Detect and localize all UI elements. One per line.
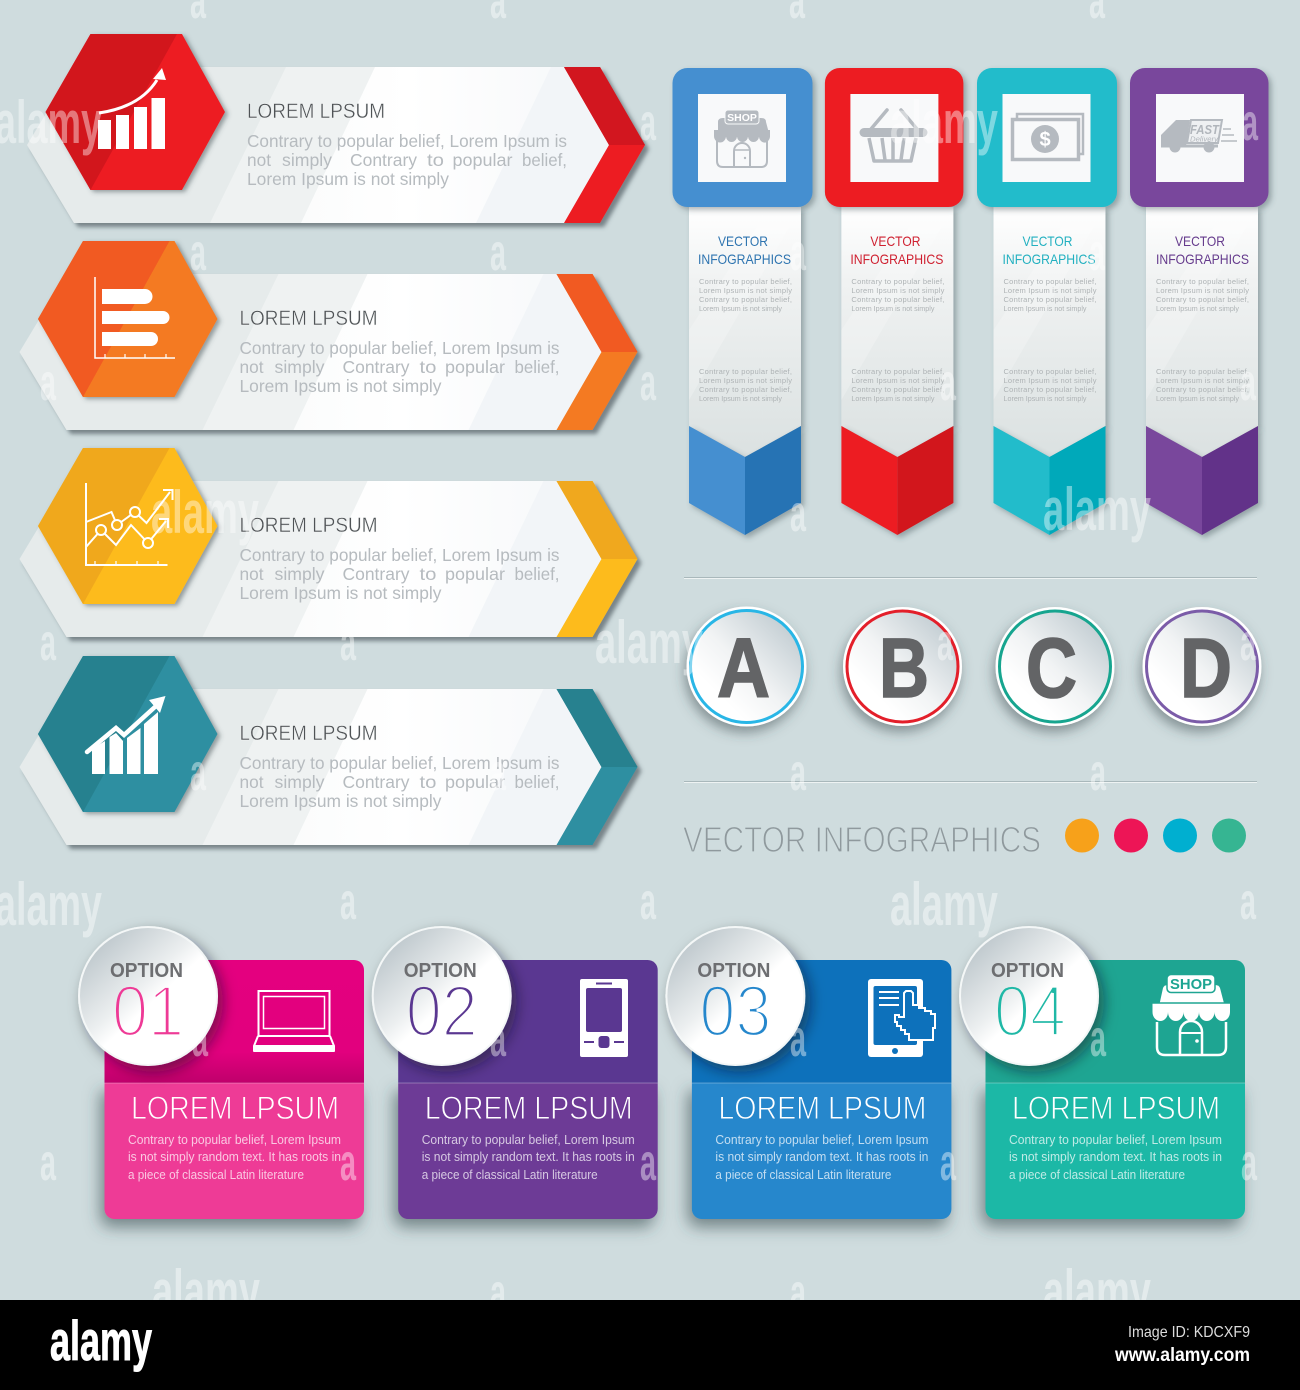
body text: Contrary to popular belief, Lorem Ipsum is — [240, 545, 560, 565]
small text block 2: Contrary to popular belief, — [1004, 385, 1096, 394]
small text block 1: Lorem Ipsum is not simply — [1004, 304, 1087, 313]
body text: simply — [274, 772, 325, 792]
small text block 2 — [1004, 367, 1097, 403]
icon: tablet with pointer hand — [868, 979, 935, 1057]
icon: shop: SHOP — [1170, 976, 1212, 993]
panel: banner 1 — [27, 34, 645, 223]
body text: belief, — [514, 564, 560, 584]
body text: Contrary to popular belief, Lorem Ipsum is — [240, 338, 560, 358]
icon: mobile phone — [580, 979, 628, 1057]
small text block 1: Lorem Ipsum is not simply — [1156, 286, 1249, 295]
small text block 1: Lorem Ipsum is not simply — [1156, 304, 1239, 313]
watermarks: a — [640, 873, 657, 931]
icon: banknotes: $ — [1039, 129, 1051, 151]
watermarks: alamy — [595, 609, 703, 676]
card body text: a piece of classical Latin literature — [1009, 1168, 1185, 1182]
option disc — [959, 926, 1099, 1066]
body text: not — [240, 564, 264, 584]
badge C — [996, 607, 1114, 726]
banner body — [20, 481, 638, 637]
body text: Contrary — [350, 150, 417, 170]
body text: Contrary — [342, 357, 410, 377]
small text block 2: Lorem Ipsum is not simply — [1156, 376, 1249, 385]
panel: column 3 cyan — [977, 68, 1117, 535]
watermarks: a — [490, 1010, 507, 1068]
watermarks: alamy — [0, 89, 102, 156]
title: VECTOR — [1022, 233, 1072, 249]
icon: fast delivery truck: Delivery — [1190, 134, 1219, 144]
icon tile — [850, 94, 938, 182]
watermarks: a — [1241, 1134, 1258, 1192]
icon frame — [672, 68, 812, 207]
panel: column 1 blue — [672, 68, 812, 535]
card bottom — [986, 1083, 1245, 1219]
icon: shop: SHOP — [727, 112, 757, 124]
banner body — [27, 67, 645, 223]
watermarks: a — [1089, 224, 1106, 282]
body text: belief, — [514, 772, 560, 792]
card body text — [715, 1133, 928, 1182]
small text block 2: Lorem Ipsum is not simply — [1004, 376, 1097, 385]
card body text: Contrary to popular belief, Lorem Ipsum — [128, 1133, 341, 1147]
arrow band upper facet — [556, 689, 638, 767]
small text block 2: Contrary to popular belief, — [1156, 385, 1249, 394]
title — [698, 233, 791, 267]
card title: LOREM LPSUM — [425, 1090, 633, 1126]
watermarks: a — [940, 354, 957, 412]
body text: Lorem Ipsum is not simply — [240, 376, 442, 396]
badge D — [1142, 607, 1262, 726]
card body text: a piece of classical Latin literature — [422, 1168, 598, 1182]
panel: option card 2 — [372, 926, 658, 1219]
watermarks: alamy — [0, 871, 102, 938]
heading: LOREM LPSUM — [240, 307, 378, 330]
watermarks: a — [1242, 94, 1259, 152]
card title: LOREM LPSUM — [718, 1090, 926, 1126]
chevron tail — [689, 426, 801, 535]
watermarks: a — [40, 1134, 57, 1192]
watermarks: alamy — [152, 1258, 260, 1325]
title: VECTOR — [718, 233, 768, 249]
panel: column 4 purple — [1130, 68, 1268, 535]
small text block 1: Contrary to popular belief, — [851, 277, 944, 286]
card title: LOREM LPSUM — [131, 1090, 339, 1126]
watermarks: a — [490, 224, 507, 282]
watermarks: a — [1090, 1010, 1107, 1068]
option number: 02 — [406, 972, 478, 1052]
card top — [692, 960, 951, 1083]
panel: banner 3 — [20, 448, 638, 637]
body text: belief, — [522, 150, 567, 170]
card body text — [1009, 1133, 1222, 1182]
small text block 1: Contrary to popular belief, — [699, 295, 792, 304]
watermarks: a — [190, 744, 207, 802]
watermarks: a — [937, 614, 954, 672]
body text: Contrary to popular belief, Lorem Ipsum is — [240, 753, 560, 773]
small text block 1 — [1004, 277, 1097, 313]
title: INFOGRAPHICS — [1156, 251, 1249, 267]
watermarks: a — [490, 744, 507, 802]
watermarks: a — [40, 614, 57, 672]
icon: basket — [864, 110, 923, 161]
watermarks: a — [40, 354, 57, 412]
small text block 2: Contrary to popular belief, — [851, 385, 944, 394]
heading: LOREM LPSUM — [240, 722, 378, 745]
small text block 1 — [1156, 277, 1249, 313]
small text block 2: Lorem Ipsum is not simply — [1156, 394, 1239, 403]
panel: option card 4 — [959, 926, 1245, 1219]
body text: simply — [274, 564, 325, 584]
badge C: C — [1026, 621, 1077, 715]
watermarks: a — [940, 1134, 957, 1192]
watermarks: alamy — [1043, 476, 1151, 543]
body text: Lorem Ipsum is not simply — [247, 169, 449, 189]
body text — [247, 131, 567, 189]
icon frame — [977, 68, 1117, 207]
icon frame — [825, 68, 963, 207]
chevron tail — [994, 426, 1106, 535]
banner body — [20, 274, 638, 430]
card title: LOREM LPSUM — [1012, 1090, 1220, 1126]
small text block 1 — [699, 277, 792, 313]
option number: 04 — [994, 972, 1066, 1052]
panel: banner 2 — [20, 241, 638, 430]
hexagon — [38, 656, 218, 812]
card body text: a piece of classical Latin literature — [715, 1168, 891, 1182]
watermarks: a — [1240, 873, 1257, 931]
panel: column 2 red — [825, 68, 963, 535]
card body text: is not simply random text. It has roots in — [715, 1150, 928, 1164]
paper strip — [994, 207, 1106, 457]
watermarks: alamy — [890, 871, 998, 938]
body text: not — [247, 150, 271, 170]
watermarks: alamy — [151, 479, 259, 546]
option disc — [78, 926, 218, 1066]
badge B: B — [879, 621, 929, 715]
watermarks: a — [790, 224, 807, 282]
watermarks: a — [1240, 354, 1257, 412]
banner body — [20, 689, 638, 845]
small text block 1: Contrary to popular belief, — [1004, 277, 1096, 286]
watermarks: a — [1090, 744, 1107, 802]
icon: banknotes — [1012, 114, 1083, 160]
body text: belief, — [514, 357, 560, 377]
body text: popular — [452, 150, 513, 170]
card top — [986, 960, 1245, 1083]
icon tile — [1156, 94, 1244, 182]
icon: shop — [1152, 974, 1230, 1055]
small text block 1: Contrary to popular belief, — [1156, 295, 1249, 304]
small text block 2: Lorem Ipsum is not simply — [851, 394, 935, 403]
small text block 1: Contrary to popular belief, — [851, 295, 944, 304]
card body text — [128, 1133, 341, 1182]
card body text: a piece of classical Latin literature — [128, 1168, 304, 1182]
watermarks: a — [192, 1010, 209, 1068]
card body text: Contrary to popular belief, Lorem Ipsum — [715, 1133, 928, 1147]
paper strip — [841, 207, 953, 457]
watermarks: a — [1240, 614, 1257, 672]
card body text: Contrary to popular belief, Lorem Ipsum — [1009, 1133, 1222, 1147]
card bottom — [398, 1083, 658, 1219]
body text: Contrary — [342, 772, 410, 792]
small text block 1: Lorem Ipsum is not simply — [1004, 286, 1097, 295]
panel: option card 1 — [78, 926, 364, 1219]
title — [850, 233, 943, 267]
arrow band upper facet — [556, 481, 638, 559]
watermarks: a — [790, 744, 807, 802]
body text: Lorem Ipsum is not simply — [240, 583, 442, 603]
panel: option card 3 — [665, 926, 951, 1219]
title — [1156, 233, 1249, 267]
body text: popular — [445, 564, 505, 584]
hexagon — [38, 241, 218, 397]
arrow band upper facet — [564, 67, 645, 145]
icon: fast delivery truck: FAST — [1190, 122, 1220, 137]
icon: bar chart with rising curve — [98, 68, 166, 149]
body text: to — [427, 150, 444, 170]
website: www.alamy.com — [1114, 1345, 1250, 1366]
arrow band upper facet — [556, 274, 638, 352]
watermarks: a — [490, 1264, 507, 1322]
chevron tail — [1146, 426, 1258, 535]
body text: not — [240, 357, 264, 377]
icon: laptop — [253, 991, 335, 1052]
heading: vector infographics: VECTOR INFOGRAPHICS — [683, 819, 1041, 860]
small text block 1: Contrary to popular belief, — [1004, 295, 1096, 304]
badge A — [686, 606, 806, 726]
watermarks: alamy — [1043, 1258, 1151, 1325]
card body text: is not simply random text. It has roots in — [1009, 1150, 1222, 1164]
card top — [104, 960, 364, 1083]
small text block 1: Contrary to popular belief, — [699, 277, 792, 286]
small text block 2: Contrary to popular belief, — [699, 385, 792, 394]
body text: Contrary — [342, 564, 410, 584]
option label: OPTION — [697, 960, 770, 982]
icon tile — [1002, 94, 1090, 182]
title: VECTOR — [1175, 233, 1225, 249]
card body text: is not simply random text. It has roots in — [128, 1150, 341, 1164]
icon: shop — [714, 110, 770, 167]
icon: fast delivery truck — [1161, 120, 1237, 152]
title: INFOGRAPHICS — [698, 251, 791, 267]
footer bar — [0, 1300, 1300, 1390]
title: VECTOR — [870, 233, 920, 249]
small text block 1: Contrary to popular belief, — [1156, 277, 1249, 286]
small text block 1: Lorem Ipsum is not simply — [699, 304, 782, 313]
title: INFOGRAPHICS — [1002, 251, 1096, 267]
watermarks: a — [340, 614, 357, 672]
chevron tail — [841, 426, 953, 535]
watermarks: a — [640, 354, 657, 412]
body text — [240, 545, 560, 603]
body text: not — [240, 772, 264, 792]
watermarks: alamy — [890, 89, 998, 156]
card body text: Contrary to popular belief, Lorem Ipsum — [422, 1133, 635, 1147]
watermarks: a — [640, 94, 657, 152]
card body text — [422, 1133, 635, 1182]
paper strip — [689, 207, 801, 457]
badge B — [843, 607, 962, 726]
watermarks: a — [790, 1264, 807, 1322]
body text: to — [420, 357, 436, 377]
small text block 2: Lorem Ipsum is not simply — [851, 376, 945, 385]
body text: Contrary to popular belief, Lorem Ipsum is — [247, 131, 567, 151]
watermarks: a — [640, 1134, 657, 1192]
body text: Lorem Ipsum is not simply — [240, 791, 442, 811]
card body text: is not simply random text. It has roots in — [422, 1150, 635, 1164]
small text block 2: Contrary to popular belief, — [1004, 367, 1096, 376]
watermarks: a — [340, 873, 357, 931]
colour dots — [1065, 818, 1246, 852]
hexagon — [46, 34, 225, 190]
small text block 2: Lorem Ipsum is not simply — [699, 376, 792, 385]
small text block 2 — [699, 367, 792, 403]
body text: simply — [274, 357, 325, 377]
body text — [240, 753, 560, 811]
panel: banner 4 — [20, 656, 638, 845]
icon tile — [698, 94, 786, 182]
image id: Image ID: KDCXF9 — [1128, 1324, 1250, 1341]
small text block 1 — [851, 277, 945, 313]
small text block 2 — [851, 367, 945, 403]
footer logo: alamy — [50, 1309, 152, 1372]
option number: 03 — [699, 972, 771, 1052]
hexagon — [38, 448, 218, 604]
body text: to — [420, 564, 436, 584]
icon frame — [1130, 68, 1268, 207]
paper strip — [1146, 207, 1258, 457]
icon: growth bars with arrow — [87, 696, 166, 774]
icon: line chart — [86, 483, 172, 565]
small text block 1: Lorem Ipsum is not simply — [851, 304, 935, 313]
watermarks: a — [340, 1134, 357, 1192]
card bottom — [692, 1083, 951, 1219]
watermarks: a — [790, 1010, 807, 1068]
small text block 2: Contrary to popular belief, — [851, 367, 944, 376]
option label: OPTION — [991, 960, 1064, 982]
badge A: A — [717, 621, 770, 715]
badge D: D — [1180, 621, 1232, 715]
option disc — [372, 926, 512, 1066]
body text: popular — [445, 772, 505, 792]
body text: popular — [445, 357, 505, 377]
option number: 01 — [112, 972, 184, 1052]
watermarks: a — [790, 485, 807, 543]
title: INFOGRAPHICS — [850, 251, 943, 267]
option disc — [665, 926, 805, 1066]
card top — [398, 960, 658, 1083]
option label: OPTION — [110, 960, 183, 982]
icon: horizontal bar chart — [95, 277, 175, 358]
small text block 1: Lorem Ipsum is not simply — [851, 286, 945, 295]
title — [1002, 233, 1096, 267]
card bottom — [104, 1083, 364, 1219]
heading: LOREM LPSUM — [240, 514, 378, 537]
body text: simply — [282, 150, 332, 170]
heading: LOREM LPSUM — [247, 100, 385, 123]
small text block 1: Lorem Ipsum is not simply — [699, 286, 792, 295]
small text block 2: Contrary to popular belief, — [1156, 367, 1249, 376]
small text block 2: Lorem Ipsum is not simply — [699, 394, 782, 403]
watermarks: a — [190, 224, 207, 282]
option label: OPTION — [404, 960, 477, 982]
body text — [240, 338, 560, 396]
body text: to — [420, 772, 436, 792]
small text block 2: Contrary to popular belief, — [699, 367, 792, 376]
small text block 2 — [1156, 367, 1249, 403]
small text block 2: Lorem Ipsum is not simply — [1004, 394, 1087, 403]
